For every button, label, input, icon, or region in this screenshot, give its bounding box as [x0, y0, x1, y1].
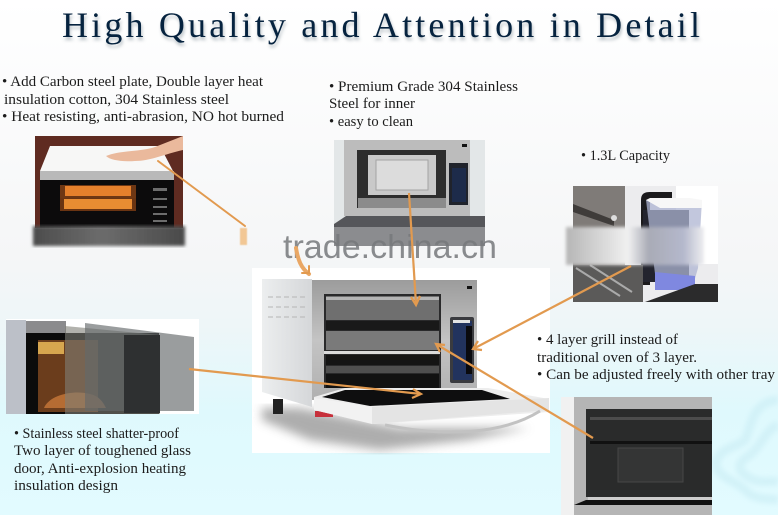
text block: shatter-proof door: door, Anti-explosion heating [14, 461, 186, 477]
feet [273, 399, 283, 414]
text block: shatter-proof door [14, 426, 191, 494]
arrow: inner steel to main oven [409, 193, 420, 305]
arrow: door to main oven [189, 369, 421, 398]
photo: water tank [566, 186, 718, 302]
arrow: tank to main oven [473, 266, 631, 350]
text block: premium stainless: Steel for inner [329, 96, 415, 112]
text block: carbon steel plate: • Add Carbon steel plate, Double layer heat [2, 74, 264, 90]
text block: premium stainless: • easy to clean [329, 114, 413, 130]
water tank window [450, 317, 474, 383]
decorative swirl [716, 400, 778, 500]
title: High Quality and Attention in Detail [62, 5, 700, 45]
shadow [262, 408, 530, 450]
photo: oven interior [334, 140, 485, 246]
photo: grill interior [561, 397, 712, 515]
title: High Quality and Attention in Detail [63, 8, 701, 48]
arrow: top plate to main oven [158, 161, 309, 274]
text block: carbon steel plate: • Heat resisting, anti-abrasion, NO hot burned [2, 109, 285, 125]
photo: main oven with open door [252, 268, 550, 453]
text block: 4 layer grill: • Can be adjusted freely with other tray [537, 367, 776, 383]
text block: carbon steel plate [2, 74, 285, 125]
side vents [268, 297, 308, 317]
text block: shatter-proof door: • Stainless steel shatter-proof [14, 426, 179, 442]
photo: glass door layers [6, 319, 199, 414]
text block: shatter-proof door: insulation design [14, 478, 119, 494]
text block: 4 layer grill: • 4 layer grill instead of [537, 332, 678, 348]
text block: 4 layer grill [537, 332, 776, 383]
arrow: grill to main oven [436, 344, 593, 438]
open door [314, 388, 549, 424]
photo: oven top with hand [33, 136, 185, 246]
oven side [262, 279, 312, 407]
text block: shatter-proof door: Two layer of toughened glass [14, 443, 191, 459]
text block: premium stainless: • Premium Grade 304 Stainless [329, 79, 518, 95]
text block: 4 layer grill: traditional oven of 3 layer. [537, 350, 697, 366]
text block: premium stainless [329, 79, 518, 130]
text block: capacity: • 1.3L Capacity [581, 148, 670, 164]
watermark: trade.china.cn [283, 228, 497, 265]
text block: carbon steel plate: insulation cotton, 304 Stainless steel [4, 92, 229, 108]
